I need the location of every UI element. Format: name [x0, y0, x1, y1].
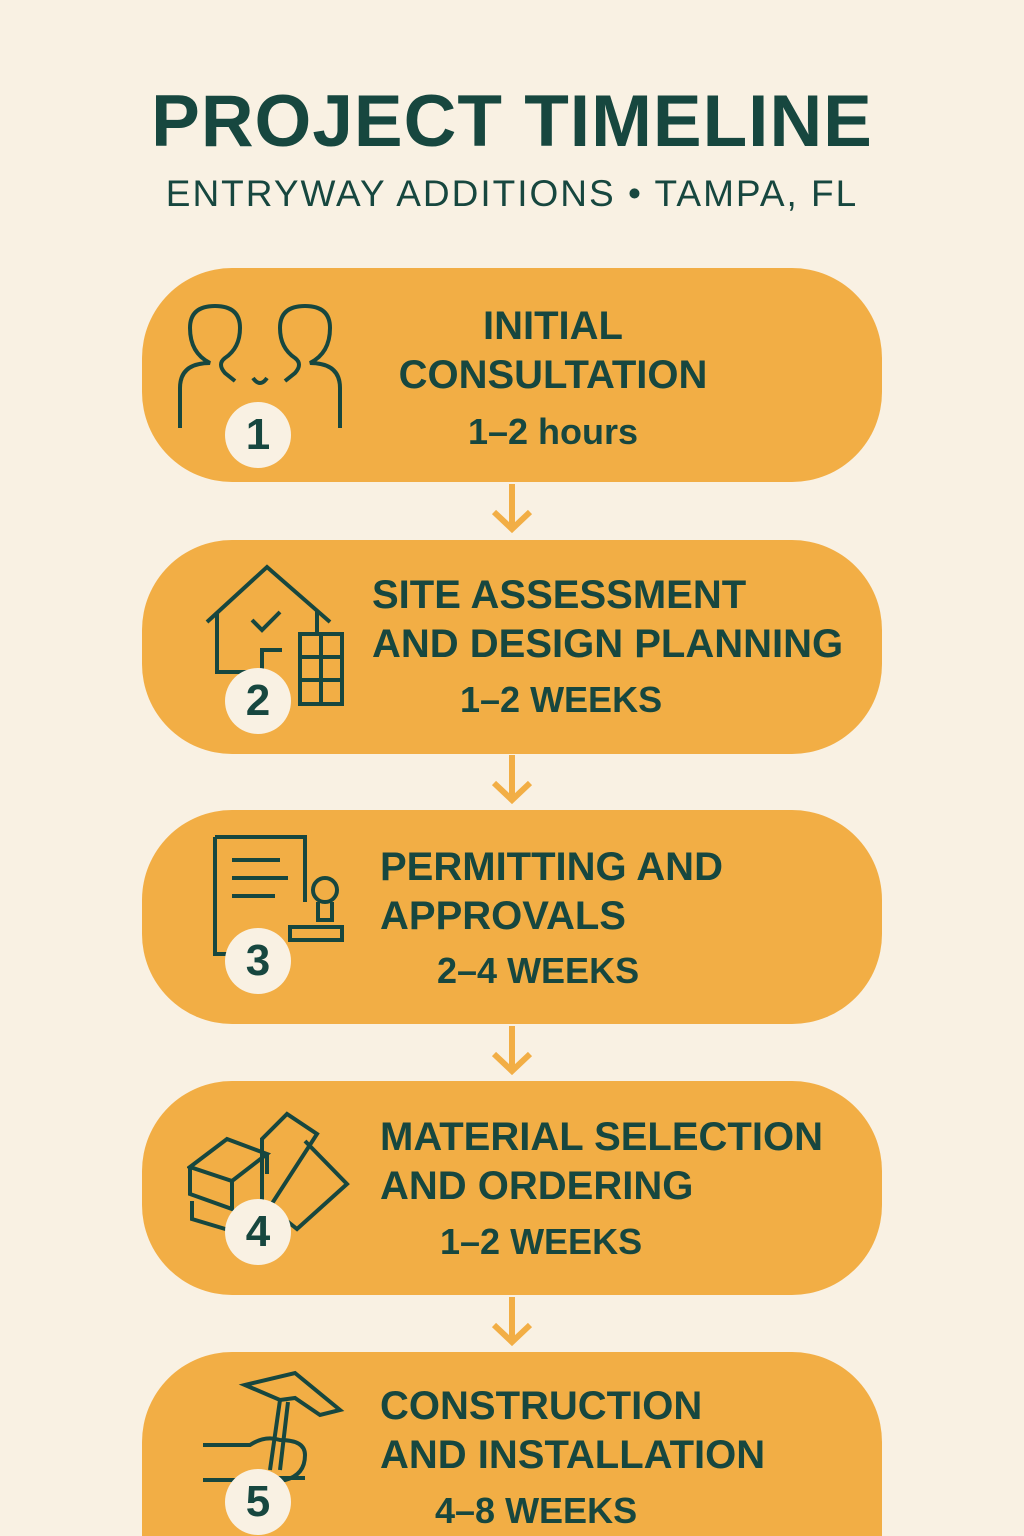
number badge 1	[225, 402, 291, 468]
arrow 1	[492, 484, 532, 533]
heading: APPROVALS	[380, 894, 626, 938]
number badge 3: 3	[246, 936, 270, 985]
heading	[399, 304, 707, 397]
heading: CONSTRUCTION	[380, 1384, 702, 1428]
title: PROJECT TIMELINE	[151, 81, 873, 162]
heading: PERMITTING AND	[380, 845, 723, 889]
arrow 4	[492, 1297, 532, 1346]
panel: step 1	[142, 268, 882, 482]
arrow 3	[492, 1026, 532, 1075]
heading: SITE ASSESSMENT	[372, 573, 746, 617]
panel: step 5	[142, 1352, 882, 1536]
icon: two people	[178, 304, 342, 428]
heading: AND ORDERING	[380, 1164, 693, 1208]
number badge 4	[225, 1199, 291, 1265]
heading	[380, 845, 723, 938]
number badge 2	[225, 668, 291, 734]
heading	[372, 573, 843, 666]
heading: INITIAL	[483, 304, 623, 348]
duration: 4–8 WEEKS	[435, 1490, 637, 1531]
number badge 2: 2	[246, 676, 270, 725]
heading: CONSULTATION	[399, 353, 707, 397]
panel: step 4	[142, 1081, 882, 1295]
heading: AND INSTALLATION	[380, 1433, 765, 1477]
arrow 2	[492, 755, 532, 804]
icon: document with stamp	[213, 835, 344, 956]
number badge 4: 4	[246, 1207, 270, 1256]
number badge 5	[225, 1469, 291, 1535]
number badge 3	[225, 928, 291, 994]
heading	[380, 1384, 765, 1477]
subtitle: ENTRYWAY ADDITIONS • TAMPA, FL	[166, 173, 858, 214]
icon: house with plan	[206, 564, 344, 706]
panel: step 2	[142, 540, 882, 754]
icon: materials	[187, 1111, 350, 1232]
heading: AND DESIGN PLANNING	[372, 622, 843, 666]
duration: 1–2 WEEKS	[460, 679, 662, 720]
heading	[380, 1115, 823, 1208]
duration: 1–2 hours	[468, 411, 638, 452]
number badge 1: 1	[246, 410, 270, 459]
heading: MATERIAL SELECTION	[380, 1115, 823, 1159]
icon: hand with hammer	[203, 1370, 344, 1482]
number badge 5: 5	[246, 1477, 270, 1526]
duration: 2–4 WEEKS	[437, 950, 639, 991]
duration: 1–2 WEEKS	[440, 1221, 642, 1262]
panel: step 3	[142, 810, 882, 1024]
